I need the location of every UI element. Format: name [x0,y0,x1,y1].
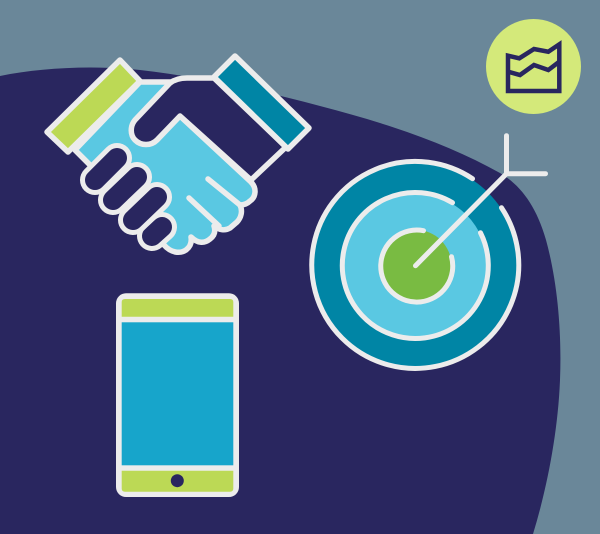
arrow [416,136,546,266]
middle ring [344,194,488,338]
outer outline [312,161,519,368]
badge circle [486,19,581,114]
bottom bar [122,471,233,492]
phone body [116,293,239,497]
home button [171,474,184,487]
icon: handshake [47,56,309,252]
right hand [131,78,286,180]
right cuff [214,56,309,149]
left hand [75,82,255,252]
icon: fingers [95,158,162,236]
bullseye [380,230,452,302]
top bar [122,299,233,317]
outer ring [312,163,518,369]
badge: area chart [486,19,581,114]
middle outline [342,193,488,339]
icon: smartphone [116,293,239,497]
screen [122,322,233,465]
chart icon [508,44,559,91]
finger creases [189,179,240,226]
inner outline [381,230,453,302]
left cuff [47,60,140,152]
icon: target [312,136,546,369]
